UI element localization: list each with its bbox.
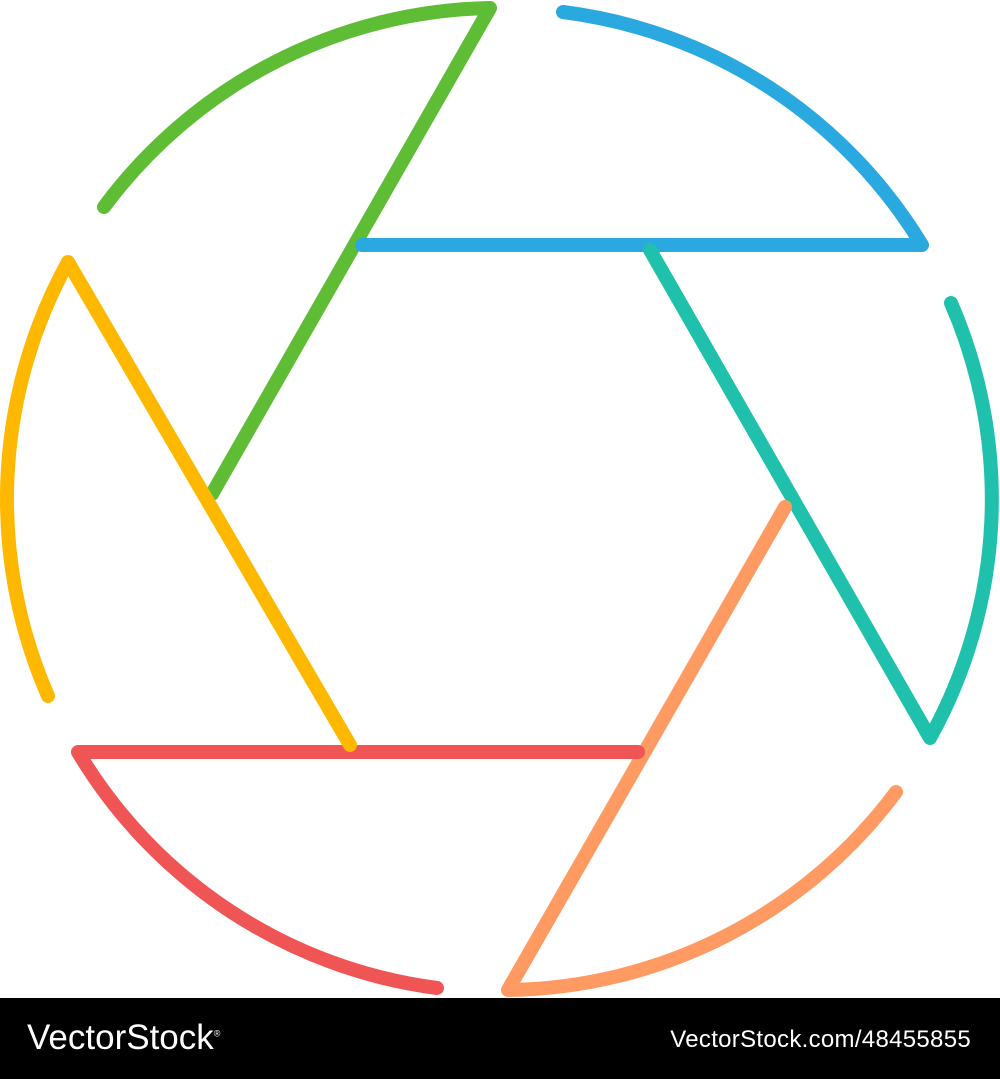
blade: teal	[650, 250, 992, 738]
blade: blue	[362, 12, 922, 245]
blade: orange	[508, 507, 896, 990]
blade: red	[78, 752, 638, 988]
footer logo text: VectorStock®	[27, 1018, 220, 1057]
blade: green	[104, 8, 490, 494]
footer bar	[0, 998, 1000, 1079]
blade: yellow	[7, 262, 350, 745]
footer url text: VectorStock.com/48455855	[670, 1026, 971, 1053]
